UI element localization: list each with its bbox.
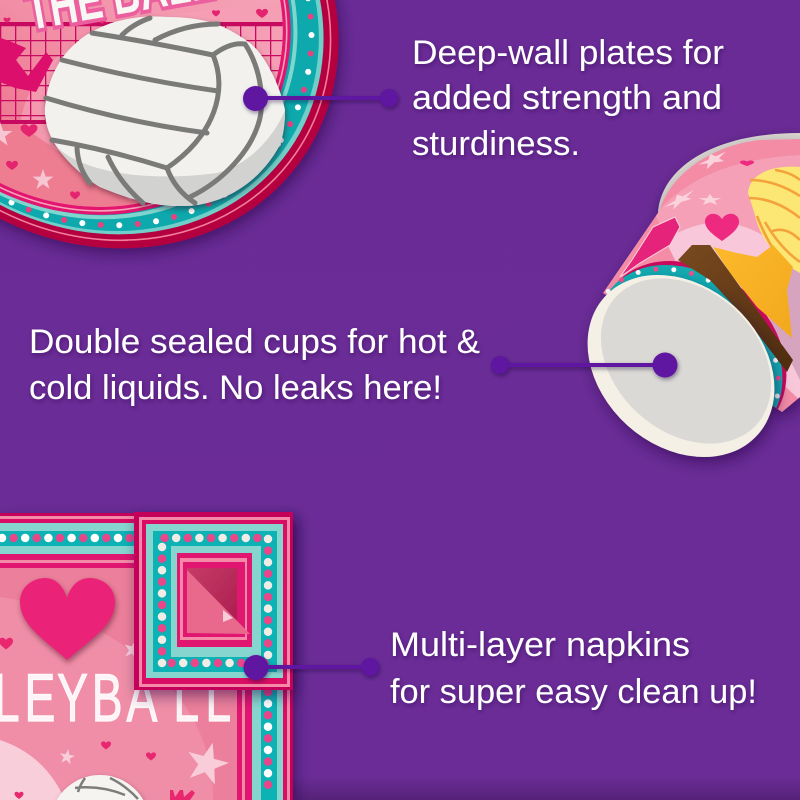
player silhouette (0, 36, 53, 92)
text: napkins (390, 626, 757, 711)
pink hand (170, 790, 195, 800)
back napkin layers (0, 513, 293, 800)
text: napkins: for super easy clean up! (390, 673, 757, 711)
text: plates: sturdiness. (412, 125, 580, 163)
plate centre artwork (0, 0, 283, 207)
callout connector: napkins (244, 655, 379, 680)
volleyball net (0, 22, 290, 124)
text: cups (29, 323, 480, 407)
pink ribbon (620, 217, 680, 277)
text: plates (412, 34, 724, 163)
cup band (606, 261, 786, 410)
big heart (20, 578, 115, 660)
text: plates: added strength and (412, 79, 722, 117)
cup illustration (584, 132, 800, 470)
back napkin dots (2, 538, 268, 795)
fold triangle (187, 570, 250, 634)
napkin volleyball (57, 775, 143, 800)
callout connector: cups (491, 352, 678, 378)
cup body (603, 139, 800, 412)
napkin illustration (0, 512, 293, 800)
fold dots (162, 538, 268, 663)
cup artwork (606, 152, 800, 410)
small hearts (0, 638, 156, 799)
plate rim rings (0, 0, 431, 344)
hearts and stars (0, 9, 268, 199)
cup bottom disc (551, 238, 800, 494)
napkin centre artwork (0, 578, 233, 800)
callout connector: plates (243, 86, 398, 111)
text: cups: cold liquids. No leaks here! (29, 369, 442, 407)
text: napkins: Multi-layer napkins (390, 626, 690, 664)
volleyball on plate (45, 16, 285, 206)
plate illustration (0, 0, 348, 261)
folded napkin corner (134, 512, 293, 690)
trophy base (678, 245, 793, 372)
napkin word: volleyball: LEYBALL (0, 660, 231, 736)
text: plates: Deep-wall plates for (412, 34, 724, 72)
cup rim (658, 133, 800, 214)
trophy stem (713, 245, 793, 338)
text: cups: Double sealed cups for hot & (29, 323, 480, 361)
stars (58, 638, 233, 787)
trophy ball (748, 167, 800, 273)
